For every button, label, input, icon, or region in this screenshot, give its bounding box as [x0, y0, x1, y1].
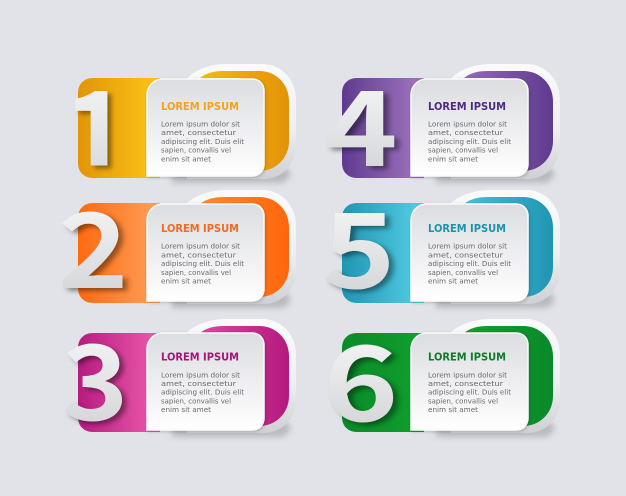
body text: enim sit amet [161, 154, 211, 163]
body text: amet, consectetur [161, 128, 236, 137]
body text: adipiscing elit. Duis elit [428, 137, 511, 146]
body text: Lorem ipsum dolor sit [161, 120, 240, 128]
drop shadow [436, 422, 554, 437]
number 6: 6 [323, 301, 398, 451]
text panel [147, 79, 264, 176]
body text: Lorem ipsum dolor sit [161, 370, 240, 379]
heading: LOREM IPSUM [428, 101, 506, 113]
heading: LOREM IPSUM [161, 352, 239, 364]
body text: amet, consectetur [161, 379, 236, 388]
right tab [464, 197, 553, 297]
body text: Lorem ipsum dolor sit [428, 370, 507, 379]
body text: adipiscing elit. Duis elit [161, 137, 244, 146]
body text [161, 120, 244, 163]
drop shadow [436, 293, 554, 308]
body text: enim sit amet [161, 405, 211, 414]
white frame [187, 190, 296, 304]
card 1 [76, 64, 296, 186]
body text: sapien, convallis vel [428, 146, 498, 155]
left bar [78, 333, 160, 432]
right tab [200, 326, 289, 426]
body text: Lorem ipsum dolor sit [161, 242, 240, 251]
body text [161, 370, 244, 414]
number 4: 4 [324, 46, 398, 197]
text panel [411, 333, 528, 430]
right tab [200, 71, 289, 171]
drop shadow [436, 168, 554, 183]
heading: LOREM IPSUM [161, 223, 239, 235]
white frame [187, 64, 296, 179]
body text: amet, consectetur [428, 379, 503, 388]
heading: LOREM IPSUM [428, 352, 506, 364]
number 2: 2 [58, 168, 129, 319]
card 5 [322, 168, 560, 319]
body text: amet, consectetur [428, 128, 503, 137]
body text: sapien, convallis vel [161, 268, 231, 277]
white frame [451, 190, 560, 304]
left bar [78, 78, 160, 178]
body text: amet, consectetur [428, 250, 503, 259]
body text: enim sit amet [161, 276, 211, 286]
number 3: 3 [62, 300, 128, 451]
body text: Lorem ipsum dolor sit [428, 242, 507, 251]
body text: sapien, convallis vel [428, 268, 498, 277]
drop shadow [172, 293, 290, 308]
body text: adipiscing elit. Duis elit [161, 388, 244, 397]
text panel [411, 204, 528, 301]
text panel [147, 333, 264, 430]
white frame [451, 64, 560, 179]
body text [428, 242, 511, 286]
drop shadow [172, 422, 290, 437]
left bar [342, 203, 424, 303]
white frame [451, 319, 560, 433]
text panel [411, 79, 528, 176]
left bar [342, 333, 424, 432]
card 3 [62, 300, 296, 451]
white frame [187, 319, 296, 433]
body text: sapien, convallis vel [161, 396, 231, 405]
left bar [78, 203, 160, 303]
body text: sapien, convallis vel [428, 396, 498, 405]
left bar [342, 78, 424, 178]
drop shadow [172, 168, 290, 183]
text panel [147, 204, 264, 301]
card 4 [324, 46, 560, 197]
body text: adipiscing elit. Duis elit [428, 259, 511, 268]
heading: LOREM IPSUM [428, 223, 506, 235]
body text: Lorem ipsum dolor sit [428, 120, 507, 128]
right tab [464, 326, 553, 426]
body text: adipiscing elit. Duis elit [161, 259, 244, 268]
body text: sapien, convallis vel [161, 146, 231, 155]
body text: adipiscing elit. Duis elit [428, 388, 511, 397]
card 2 [58, 168, 296, 319]
right tab [464, 71, 553, 171]
number 5: 5 [322, 168, 396, 319]
body text [161, 242, 244, 286]
right tab [200, 197, 289, 297]
heading: LOREM IPSUM [161, 101, 239, 113]
body text: amet, consectetur [161, 250, 236, 259]
number 1: 1 [63, 34, 130, 220]
body text: enim sit amet [428, 276, 478, 286]
body text: enim sit amet [428, 405, 478, 414]
body text [428, 120, 511, 163]
card 6 [323, 301, 560, 451]
body text: enim sit amet [428, 154, 478, 163]
body text [428, 370, 511, 414]
